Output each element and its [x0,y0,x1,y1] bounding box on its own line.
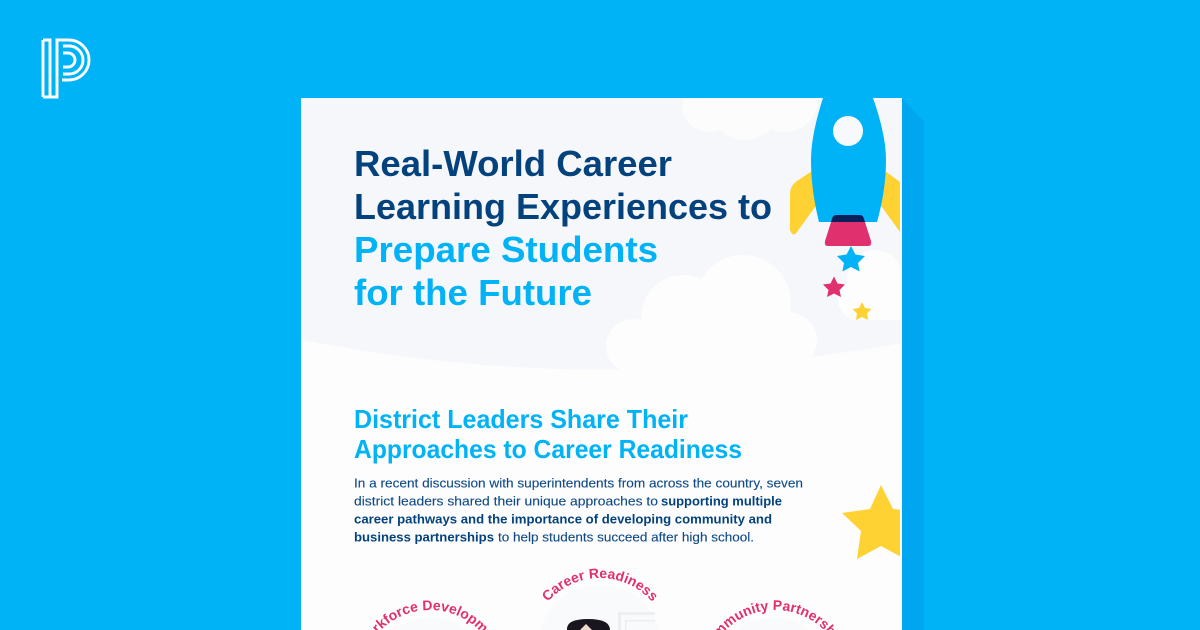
rocket nozzle [824,222,872,246]
title: Learning Experiences to [354,186,772,227]
career label: Career Readiness [542,568,656,601]
portrait face [580,624,592,630]
title: Prepare Students [354,229,658,270]
title: for the Future [354,272,592,313]
workforce circle [393,618,467,630]
rocket [790,98,900,246]
topic: community partnerships [716,600,834,630]
title: Real-World Career [354,143,672,184]
intro paragraph: In a recent discussion with superintendents from across the country, seven [354,476,803,490]
star: large yellow [842,485,900,559]
title [354,143,772,313]
star: yellow [852,302,872,320]
rocket window [833,116,863,146]
cloud: top [682,66,818,140]
career circle [540,585,660,630]
star: blue [837,246,865,272]
rocket body [811,98,886,222]
infographic page [301,98,902,630]
header background [301,98,902,370]
intro paragraph: district leaders shared their unique approaches to [354,494,658,508]
subheading: District Leaders Share Their [354,404,688,434]
intro paragraph: business partnerships [354,530,494,544]
cloud: right [838,250,903,320]
intro paragraph [354,476,803,544]
logo [43,40,89,97]
intro paragraph: to help students succeed after high school. [498,530,754,544]
intro paragraph: supporting multiple [661,494,782,508]
page background [301,340,902,630]
topic: career readiness [542,568,656,630]
portrait hair [567,619,610,630]
intro paragraph: career pathways and the importance of developing community and [354,512,772,526]
subheading [354,404,742,464]
page side shadow [902,98,924,630]
cloud: large [606,255,817,373]
community circle [736,618,810,630]
subheading: Approaches to Career Readiness [354,434,742,464]
star: pink [823,276,845,297]
topic: workforce development [373,600,486,630]
nozzle overlap [831,215,865,222]
rocket fins [790,171,900,235]
document [618,612,655,630]
